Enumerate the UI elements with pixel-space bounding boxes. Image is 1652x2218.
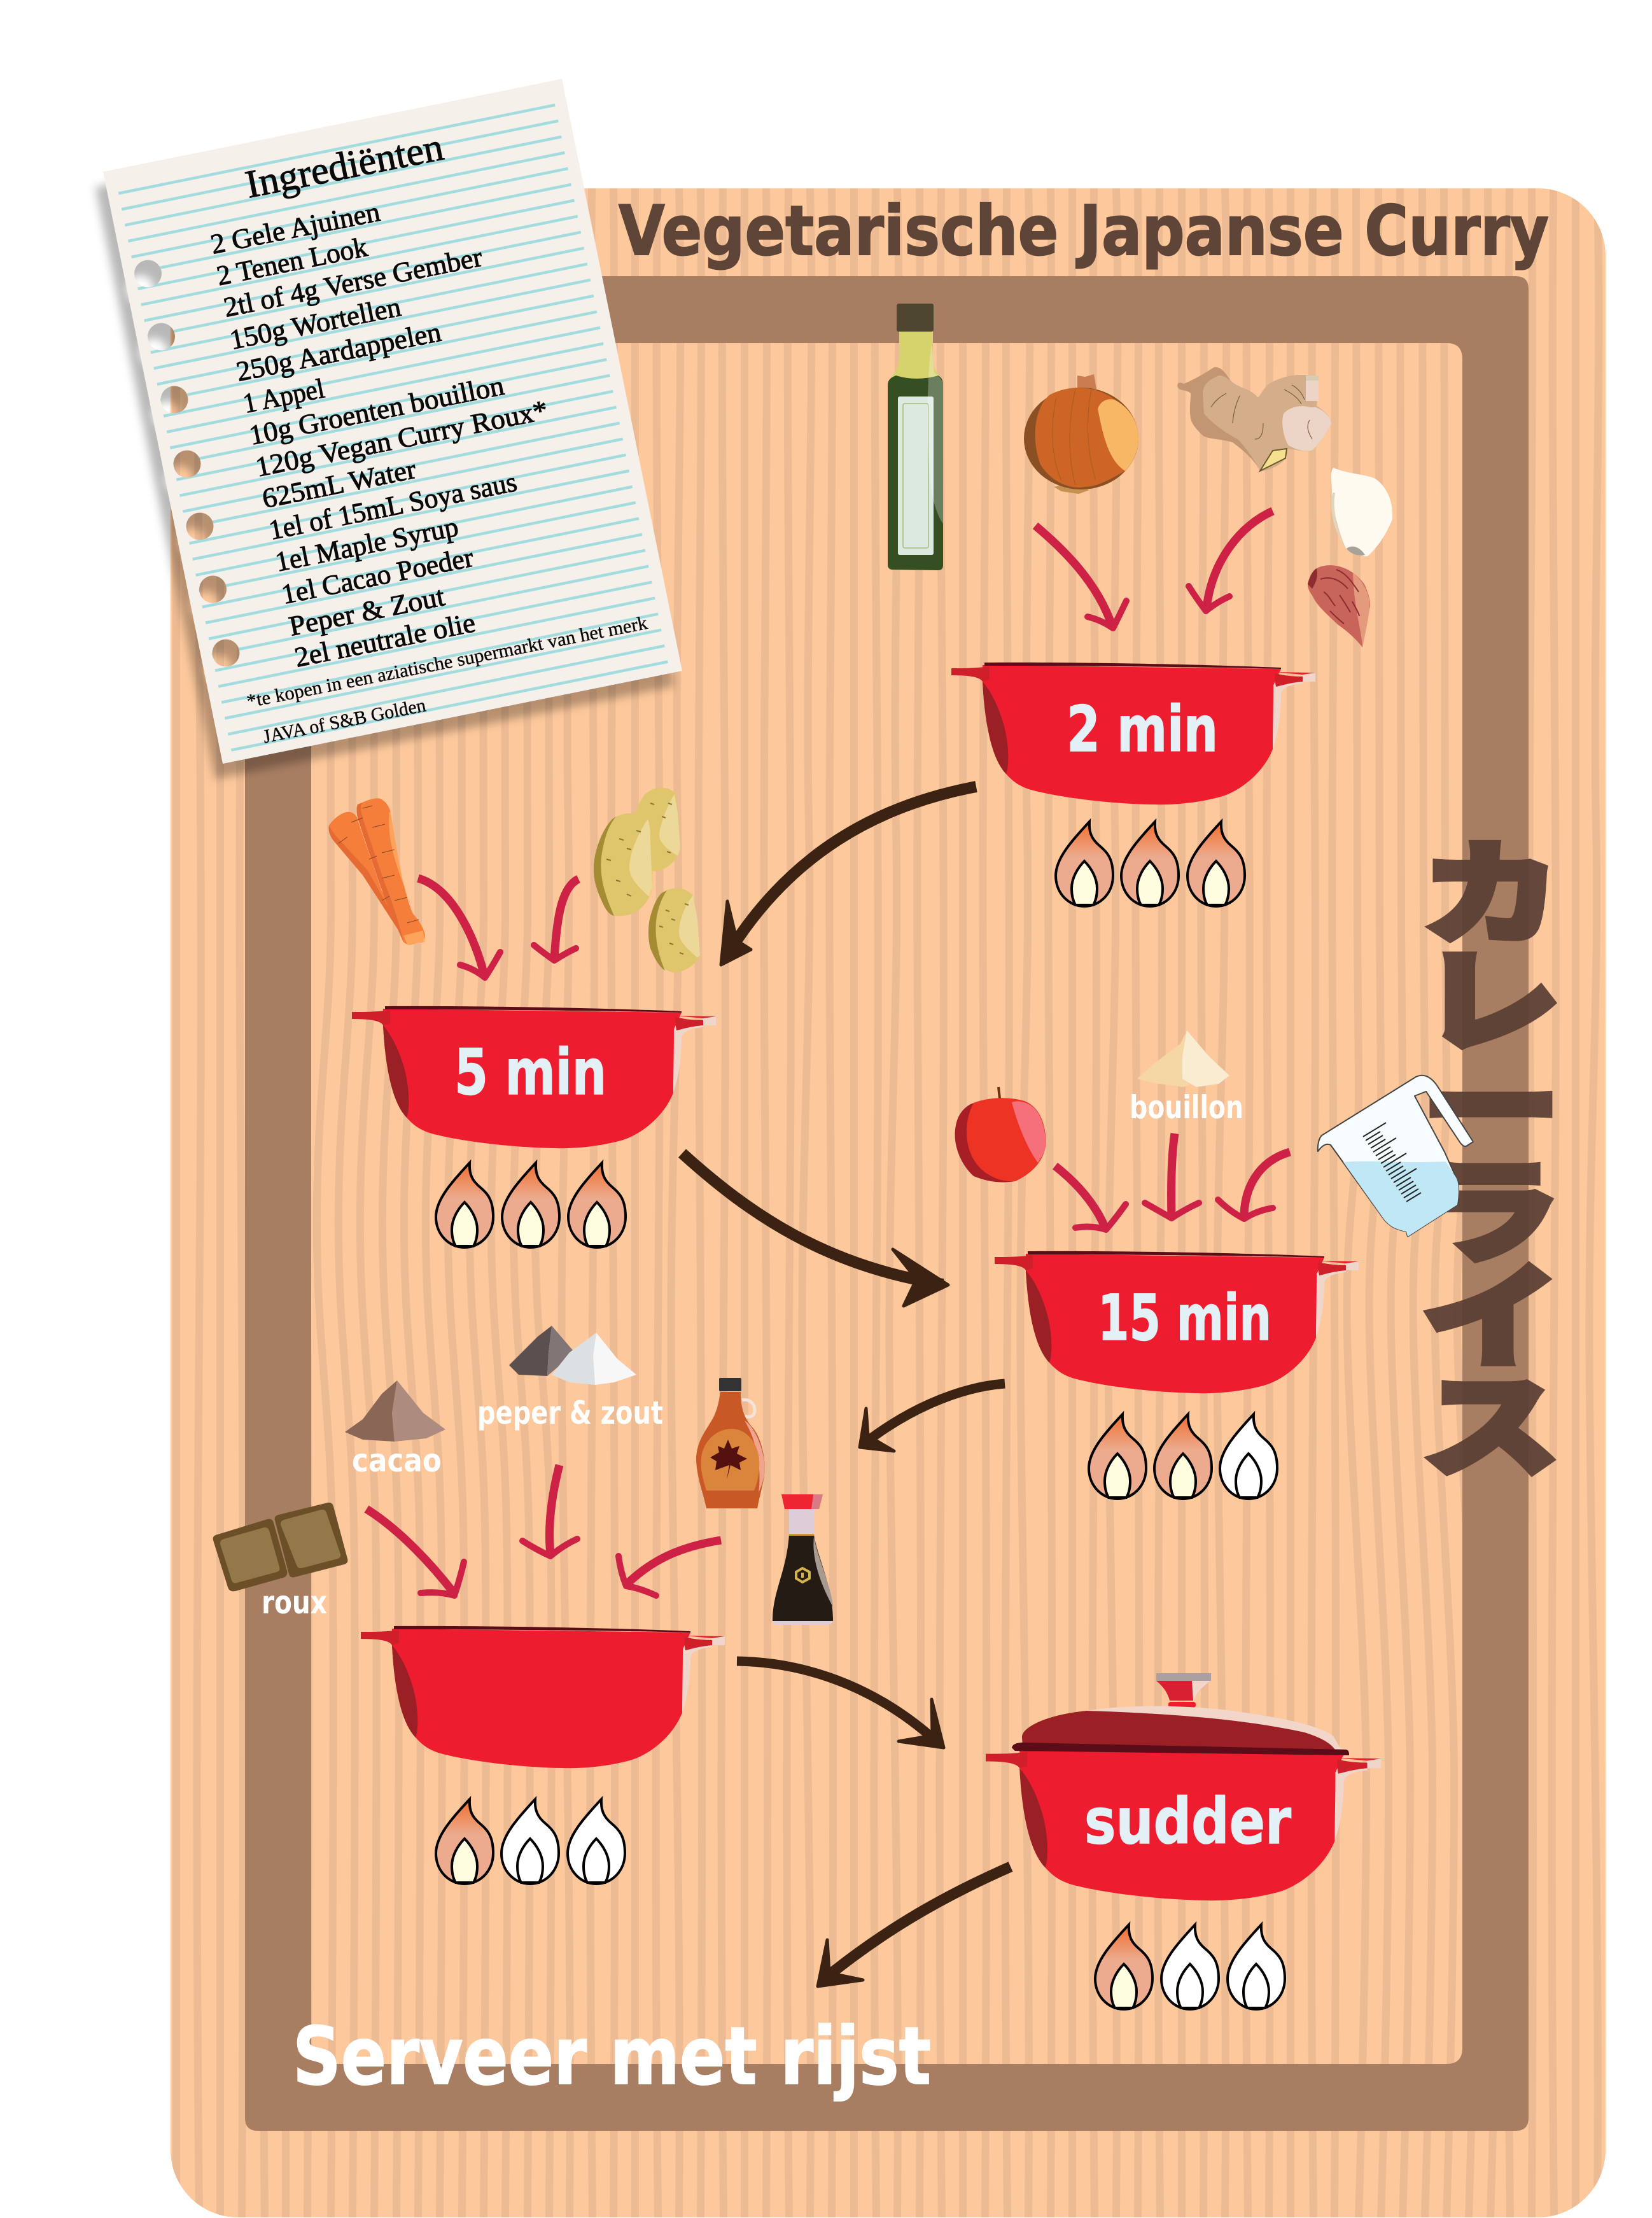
- ingredient list: 150g Wortellen: [227, 291, 403, 356]
- arrow: onion to pot: [1035, 526, 1126, 628]
- ingredient list: 10g Groenten bouillon: [246, 370, 507, 451]
- vertical katakana heading: ラ: [1421, 1152, 1561, 1277]
- serve with rice text: Serveer met rijst: [293, 2011, 931, 2103]
- arrow: apple to pot: [1055, 1166, 1126, 1230]
- ingredient list: Peper & Zout: [286, 580, 447, 642]
- vertical katakana heading: ー: [1421, 1047, 1561, 1172]
- ingredient list: 1el Maple Syrup: [272, 511, 461, 578]
- icon: curry roux blocks: [213, 1503, 347, 1591]
- ingredient list: 120g Vegan Curry Roux*: [253, 394, 550, 483]
- paper sheet with ruled lines: [103, 79, 682, 764]
- ingredient list: [208, 196, 550, 673]
- ingredient list: 625mL Water: [260, 453, 419, 514]
- icon: bouillon powder pile: [1137, 1030, 1229, 1087]
- arrow: syrup and soy to pot: [619, 1540, 721, 1596]
- arrow: bouillon to pot: [1145, 1134, 1199, 1218]
- ingredient list: 1 Appel: [241, 372, 327, 419]
- step 1 pot: 2 min: [951, 663, 1315, 804]
- icon: shallot clove: [1308, 565, 1370, 647]
- icon: potatoes: [594, 788, 700, 972]
- flames: high heat: [436, 1163, 626, 1247]
- vertical katakana heading: [1421, 833, 1561, 1491]
- step 4 pot: [361, 1626, 725, 1768]
- step 3 pot: 15 min: [995, 1251, 1359, 1393]
- cutting board: [171, 188, 1606, 2218]
- icon: apple: [955, 1087, 1046, 1183]
- pepper and salt label: peper & zout: [477, 1394, 663, 1431]
- pot lid: [1012, 1673, 1349, 1755]
- timer label: 2 min: [1067, 693, 1218, 766]
- icon: measuring jug with water: [1318, 1076, 1473, 1237]
- ingredient note paper: [64, 64, 700, 779]
- vertical katakana heading: イ: [1421, 1257, 1561, 1382]
- flames: medium heat: [1089, 1414, 1277, 1499]
- arrow: step 3 to step 4: [860, 1384, 1005, 1451]
- ingredients heading: Ingrediënten: [242, 125, 447, 207]
- ingredient list: 2 Tenen Look: [214, 231, 370, 291]
- icon: garlic clove: [1331, 468, 1392, 556]
- icon: carrots: [328, 798, 425, 944]
- arrow: cacao and roux to pot: [367, 1509, 464, 1596]
- icon: maple syrup bottle: [696, 1378, 765, 1508]
- ingredient list: 2 Gele Ajuinen: [208, 196, 382, 260]
- icon: ginger root: [1177, 367, 1331, 471]
- ingredient list: 1el of 15mL Soya saus: [266, 466, 519, 546]
- icon: cacao powder pile: [345, 1380, 445, 1442]
- arrow: step 1 to step 2: [721, 787, 976, 965]
- ingredient list: 2el neutrale olie: [292, 607, 478, 673]
- icon: olive oil bottle: [888, 304, 943, 570]
- arrow: carrots to pot: [418, 878, 500, 978]
- arrow: simmer to serve: [818, 1867, 1011, 1986]
- bouillon label: bouillon: [1130, 1089, 1243, 1126]
- icon: pepper and salt piles: [509, 1326, 636, 1385]
- arrow: water to pot: [1218, 1152, 1290, 1219]
- timer label: 15 min: [1098, 1282, 1271, 1355]
- simmer label: sudder: [1084, 1785, 1291, 1858]
- flames: low heat: [1095, 1925, 1285, 2009]
- icon: soy sauce bottle: [773, 1494, 833, 1625]
- board inner frame: [245, 276, 1529, 2131]
- arrow: step 4 to simmer: [737, 1661, 944, 1748]
- timer label: 5 min: [454, 1036, 606, 1109]
- vertical katakana heading: レ: [1421, 940, 1561, 1065]
- roux label: roux: [262, 1584, 327, 1621]
- arrow: ginger to pot: [1189, 511, 1273, 611]
- cacao label: cacao: [352, 1442, 442, 1479]
- vertical katakana heading: カ: [1421, 833, 1561, 958]
- step 5 pot with lid: simmer: [986, 1673, 1381, 1900]
- footnote: JAVA of S&B Golden: [261, 694, 428, 747]
- arrow: potatoes to pot: [534, 879, 578, 960]
- paper shadow: [95, 94, 675, 779]
- arrow: step 2 to step 3: [682, 1153, 948, 1306]
- footnote: *te kopen in een aziatische supermarkt van het merk: [245, 612, 649, 712]
- arrow: pepper and salt to pot: [522, 1465, 577, 1556]
- flames: low heat: [436, 1799, 625, 1884]
- ingredient list: 1el Cacao Poeder: [279, 542, 476, 610]
- ingredient list: 2tl of 4g Verse Gember: [221, 241, 485, 323]
- flames: high heat: [1056, 822, 1245, 906]
- icon: onion: [1024, 374, 1138, 494]
- step 2 pot: 5 min: [352, 1006, 716, 1148]
- vertical katakana heading: ス: [1421, 1366, 1561, 1491]
- ingredient list: 250g Aardappelen: [234, 316, 444, 388]
